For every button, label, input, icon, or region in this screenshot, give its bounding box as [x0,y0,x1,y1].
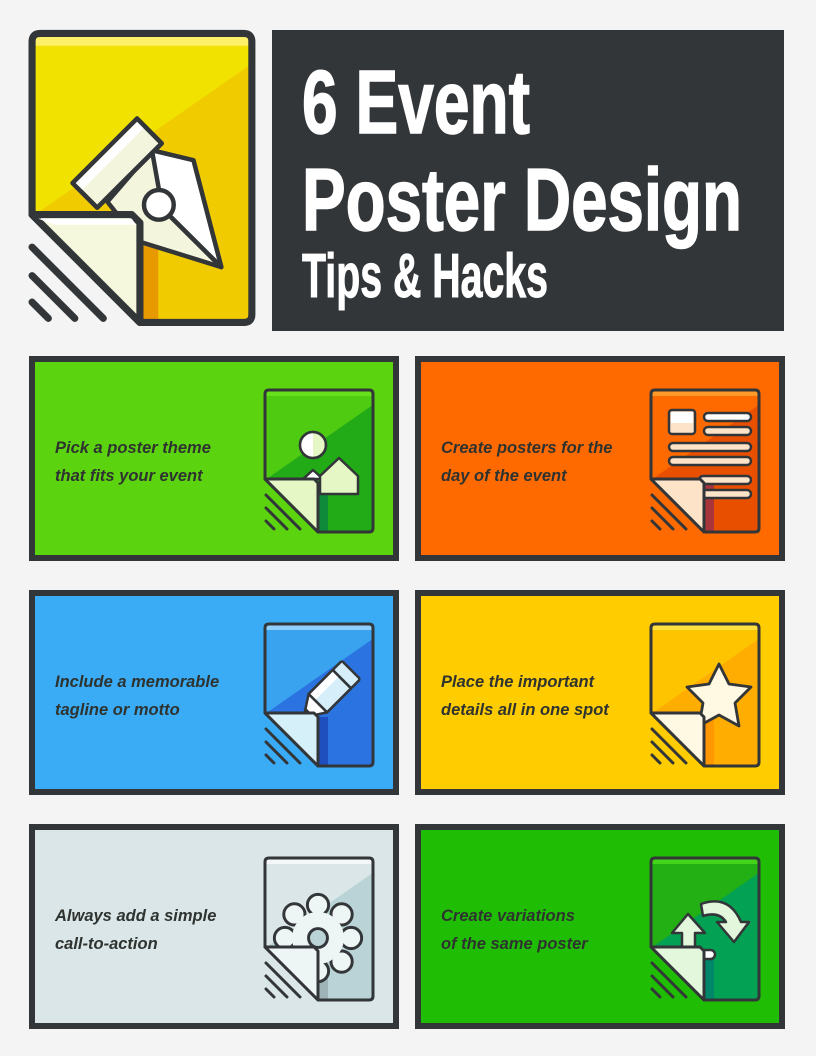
icon: gear poster [263,856,374,1002]
card 6: variations [415,824,785,1029]
text: card 6 [441,907,588,953]
title panel [272,30,784,331]
icon: arrows poster [649,856,760,1002]
text: card 4: details all in one spot [441,701,609,719]
card 3: tagline [29,590,399,795]
text: card 1: Pick a poster theme [55,439,211,457]
card 4: important details [415,590,785,795]
icon: text document poster [649,388,760,534]
text: card 2 [441,439,612,485]
icon: star poster [649,622,760,768]
text: card 2: day of the event [441,467,567,485]
icon: pencil poster [263,622,374,768]
text: card 3: Include a memorable [55,673,219,691]
text: card 1: that fits your event [55,467,203,485]
text: card 6: Create variations [441,907,575,925]
header icon: pen nib poster [28,30,256,326]
pen nib [73,119,221,267]
title panel: Tips & Hacks [302,242,548,311]
text: card 5: call-to-action [55,935,158,953]
text: card 5: Always add a simple [55,907,216,925]
text: card 3 [55,673,219,719]
text: card 4 [441,673,610,719]
card 5: call to action [29,824,399,1029]
text: card 2: Create posters for the [441,439,612,457]
icon: landscape poster [263,388,374,534]
text: card 1 [55,439,211,485]
title panel: 6 Event [302,53,530,153]
text: card 3: tagline or motto [55,701,180,719]
text: card 6: of the same poster [441,935,588,953]
text: card 5 [54,907,216,953]
text: card 4: Place the important [441,673,594,691]
card 2: day of the event [415,356,785,561]
card 1: poster theme [29,356,399,561]
